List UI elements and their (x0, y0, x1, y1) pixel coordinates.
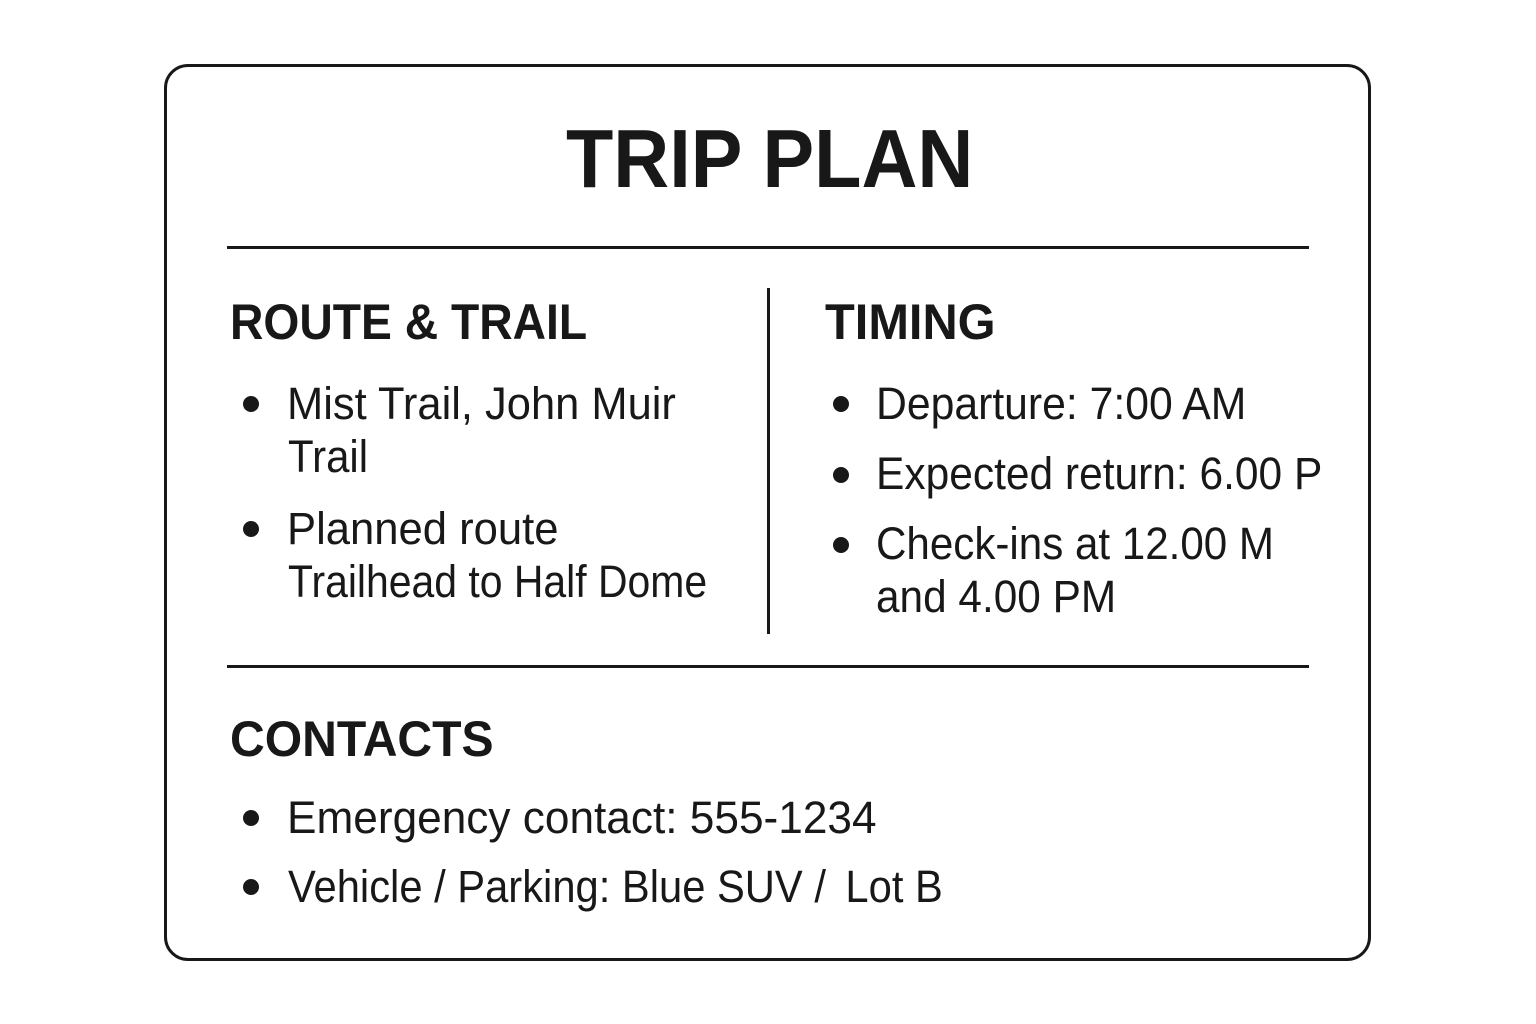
heading: route and trail: ROUTE & TRAIL (230, 294, 587, 350)
bullet: trails: Mist Trail, John Muir (287, 378, 676, 429)
panel: timing (825, 294, 1322, 622)
bullet: expected return: Expected return: 6.00 P (876, 448, 1322, 499)
bullet: trails (243, 378, 676, 482)
panel: route and trail (230, 294, 707, 607)
bullet: planned route (243, 503, 707, 607)
heading: timing: TIMING (825, 294, 996, 350)
heading: contacts: CONTACTS (230, 711, 494, 767)
bullet: trails: Trail (288, 431, 368, 482)
card panel (164, 64, 1371, 961)
panel: contacts (230, 711, 943, 912)
bullet: check-ins: Check-ins at 12.00 M (876, 518, 1274, 569)
bullet: planned route: Planned route (287, 503, 559, 554)
bullet: departure: Departure: 7:00 AM (876, 378, 1246, 429)
bullet: vehicle and parking: Vehicle / Parking: Blue SUV / Lot B (288, 861, 943, 912)
bullet: emergency contact: Emergency contact: 555-1234 (287, 792, 877, 843)
bullet: planned route: Trailhead to Half Dome (288, 556, 707, 607)
bullet: check-ins (833, 518, 1274, 622)
bullet: check-ins: and 4.00 PM (876, 571, 1116, 622)
title: TRIP PLAN (566, 112, 973, 205)
